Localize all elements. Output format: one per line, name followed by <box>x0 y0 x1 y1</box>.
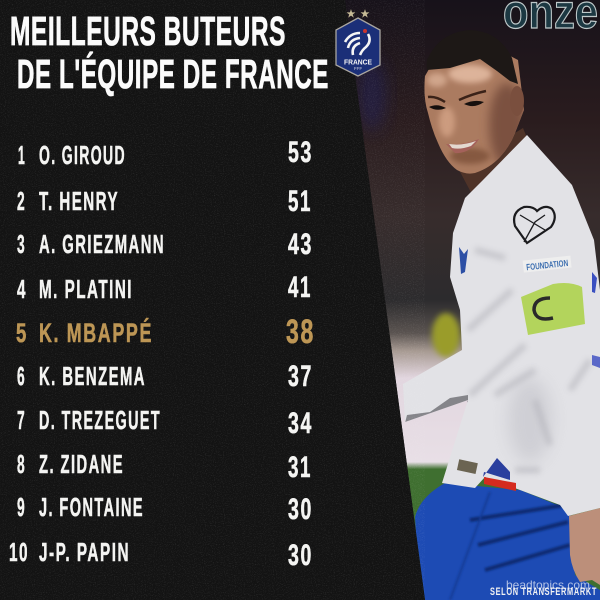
dark textured panel <box>0 0 425 600</box>
icon: FFF crest: FRANCE <box>344 58 372 66</box>
sleeve stripes <box>592 272 597 293</box>
crest on shirt <box>459 247 468 274</box>
row 4 <box>17 271 312 304</box>
row 5 highlighted: 38 <box>286 313 315 351</box>
row 5 highlighted: 5 <box>16 318 28 348</box>
row 9: 9 <box>17 494 26 522</box>
mouth <box>446 139 479 153</box>
row 7: 34 <box>288 407 313 440</box>
row 8 <box>17 451 312 484</box>
row 8: 31 <box>288 451 312 484</box>
row 3: 3 <box>17 231 26 259</box>
row 6: 37 <box>288 360 313 393</box>
row 9: J. FONTAINE <box>39 494 144 522</box>
foundation patch <box>523 256 572 273</box>
patch <box>457 459 478 474</box>
row 3: A. GRIEZMANN <box>39 231 165 259</box>
row 3: 43 <box>288 228 313 261</box>
yellow stadium light <box>432 313 460 357</box>
icon: FFF crest: ★ <box>361 9 370 20</box>
row 9 <box>17 493 313 526</box>
eyebrows and eyes <box>428 97 445 102</box>
foundation patch: FOUNDATION <box>526 258 569 272</box>
row 4: 4 <box>17 276 27 304</box>
row 4: M. PLATINI <box>39 276 133 304</box>
row 7: D. TREZEGUET <box>39 407 161 435</box>
row 2: T. HENRY <box>39 188 119 216</box>
row 1: 53 <box>288 136 313 169</box>
row 5 highlighted: K. MBAPPÉ <box>39 317 153 348</box>
row 2 <box>17 185 312 218</box>
row 10: 30 <box>288 539 313 572</box>
row 6: 6 <box>17 363 26 391</box>
row 6 <box>17 360 313 393</box>
sleeve shadow <box>405 395 468 423</box>
watermark: beadtopics.com <box>506 578 590 592</box>
shorts <box>415 483 600 600</box>
neck <box>460 128 526 192</box>
title: MEILLEURS BUTEURS <box>10 8 286 54</box>
row 4: 41 <box>288 271 312 304</box>
row 3 <box>17 228 313 261</box>
row 2: 51 <box>288 185 312 218</box>
player <box>403 30 600 600</box>
hair <box>428 40 518 84</box>
row 7 <box>17 407 313 440</box>
row 10: 10 <box>9 539 29 567</box>
hand <box>569 508 600 585</box>
shirt hem trim <box>483 458 510 480</box>
ear <box>512 86 524 115</box>
row 8: 8 <box>17 451 26 479</box>
captain armband <box>521 283 585 335</box>
icon: FFF crest: FFF <box>354 66 362 71</box>
row 2: 2 <box>17 188 26 216</box>
title <box>10 8 329 97</box>
icon: FFF crest <box>336 9 380 76</box>
blue glow at top left of photo <box>358 59 386 131</box>
row 5 highlighted <box>16 313 315 351</box>
row 10: J-P. PAPIN <box>39 539 130 567</box>
row 7: 7 <box>17 407 26 435</box>
row 8: Z. ZIDANE <box>39 451 124 479</box>
jersey <box>403 135 600 516</box>
row 1: 1 <box>18 142 26 170</box>
row 10 <box>9 539 313 572</box>
row 1: O. GIROUD <box>39 142 126 170</box>
icon: heart sleeve badge <box>514 207 555 243</box>
photo: stadium background <box>340 0 600 600</box>
row 9: 30 <box>288 493 313 526</box>
row 1 <box>18 136 313 170</box>
face <box>424 56 524 174</box>
ranking table <box>9 136 315 572</box>
title: DE L'ÉQUIPE DE FRANCE <box>17 51 329 97</box>
icon: FFF crest: ★ <box>347 9 356 20</box>
row 6: K. BENZEMA <box>39 363 146 391</box>
